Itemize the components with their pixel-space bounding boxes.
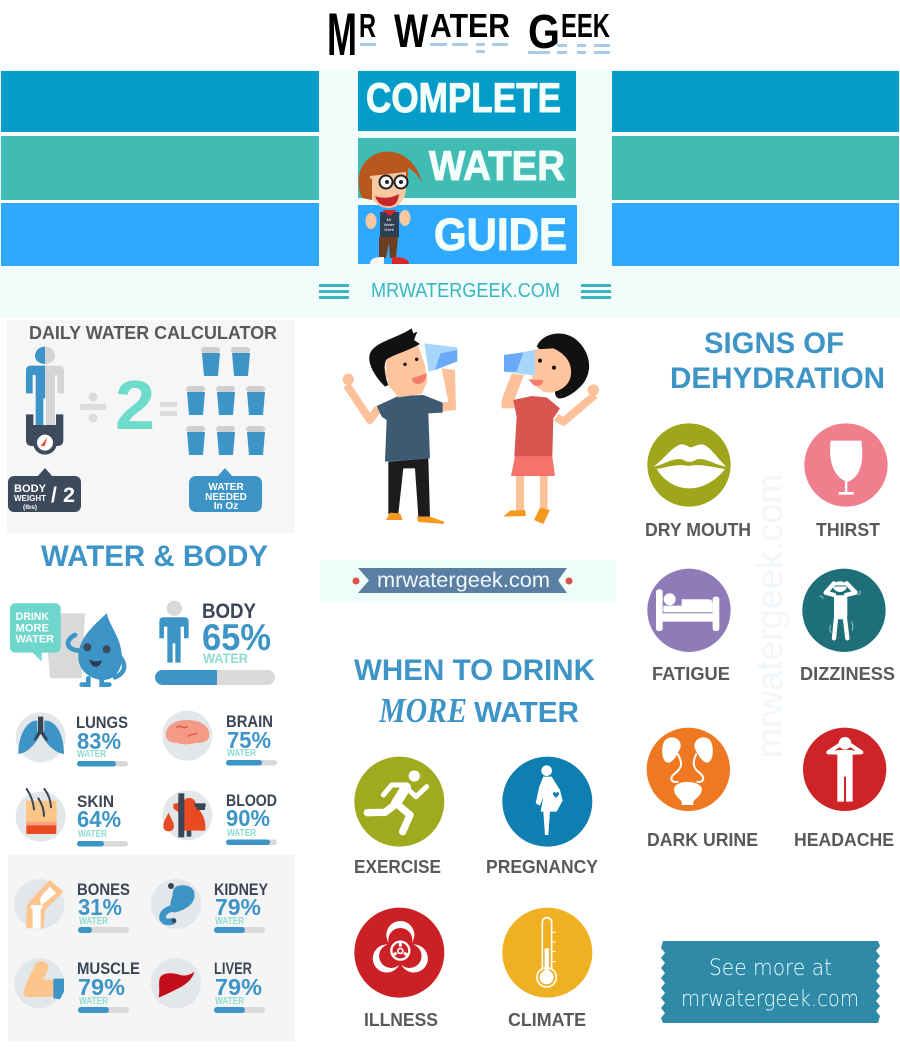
stat: kidney 79% [151,879,268,933]
icon: water glasses [186,347,265,455]
stat: liver 79% [151,958,265,1013]
heading: signs of dehydration [670,327,885,395]
callout: water needed in oz: NEEDED [205,492,247,503]
stat: brain 75% [162,711,277,766]
callout: water needed in oz: WATER [208,482,244,493]
heading: signs of dehydration: DEHYDRATION [670,362,885,395]
icon: dry mouth [647,423,731,507]
callout: see more at mrwatergeek.com: mrwatergeek.com [681,987,859,1012]
stat: blood 90%: 90% [226,805,270,831]
stat: bones 31%: WATER [79,916,109,927]
stat: lungs 83% [16,712,128,766]
stat: muscle 79% [14,958,140,1013]
title: Complete Water Guide: WATER [429,142,565,189]
icon: headache [803,728,886,811]
icon: equals sign [160,402,177,416]
icon: climate thermometer [502,908,592,998]
stat: blood 90%: BLOOD [226,792,277,810]
callout: body weight divided by 2 [8,468,81,512]
stat: blood 90%: WATER [227,828,257,839]
heading: when to drink more water [354,654,595,730]
watermark: mrwatergeek.com: mrwatergeek.com [749,474,790,758]
logo: Mr Water Geek: G [528,6,560,59]
stat: skin 64%: SKIN [77,793,114,811]
icon: body figure [159,601,189,663]
label: dry mouth: DRY MOUTH [645,520,751,540]
callout: body weight divided by 2: / [51,484,57,507]
big number two: 2 [115,366,155,444]
stat: muscle 79%: WATER [79,996,109,1007]
icon: drink more water drop: MORE [16,622,49,634]
banner: mrwatergeek.com ribbon: mrwatergeek.com [377,569,550,592]
icon: divide sign [80,392,106,422]
stat: body 65% water [155,600,275,685]
icon: stomach kidney [151,879,201,929]
label: illness: ILLNESS [364,1010,438,1030]
icon: flexed arm [14,958,64,1008]
banner: mrwatergeek.com ribbon [320,560,616,602]
stat: kidney 79%: 79% [215,894,261,920]
label: exercise: EXERCISE [354,857,441,877]
stat: bones 31% [14,879,130,933]
stat: body 65% water: BODY [202,600,256,623]
icon: drink more water drop [10,603,124,685]
logo: Mr Water Geek: R [359,7,376,44]
icon: drink more water drop: WATER [16,634,54,646]
label: pregnancy: PREGNANCY [486,857,598,877]
illustration: man drinking water [343,328,457,524]
heading: when to drink more water: WATER [474,697,579,729]
stat: skin 64%: 64% [77,806,121,832]
stat: lungs 83%: WATER [77,749,107,760]
logo: Mr Water Geek: ATER [430,7,510,44]
header background panel [0,70,900,318]
label: dark urine: DARK URINE [647,830,758,850]
label: climate: CLIMATE [508,1010,586,1030]
label: dizziness: DIZZINESS [800,664,895,684]
stat: body 65% water: 65% [202,617,271,658]
icon: heart and blood [162,790,212,840]
logo: Mr Water Geek: M [327,1,357,68]
stat: bones 31%: 31% [78,894,122,920]
stat: brain 75%: 75% [227,727,271,753]
callout: body weight divided by 2: WEIGHT [14,493,47,503]
title: Complete Water Guide [358,71,577,264]
callout: see more at mrwatergeek.com: See more at [709,956,832,981]
stat: kidney 79%: KIDNEY [214,881,268,899]
callout: body weight divided by 2: BODY [14,483,47,495]
stat: muscle 79%: 79% [78,974,125,1000]
logo: Mr Water Geek: W [394,4,428,57]
stat: blood 90% [162,790,277,845]
icon: lungs [16,712,66,762]
stat: lungs 83%: LUNGS [76,714,128,732]
icon: skin layers [16,789,66,842]
heading: daily water calculator: DAILY WATER CALCULATOR [29,322,277,343]
panel: organs lower grey [8,855,295,1041]
callout: water needed in oz: In Oz [214,501,238,512]
stat: liver 79%: WATER [215,996,245,1007]
icon: drink more water drop: DRINK [16,611,49,623]
icon: dizziness [802,569,886,652]
heading: when to drink more water: MORE [378,691,467,730]
callout: water needed in oz [189,468,262,512]
label: thirst: THIRST [816,520,880,540]
icon: fatigue bed [647,569,731,652]
title: Complete Water Guide: COMPLETE [366,74,561,121]
website strip: mrwatergeek.com: MRWATERGEEK.COM [371,280,560,302]
callout: body weight divided by 2: 2 [63,484,75,507]
icon: illness biohazard [354,908,444,998]
title: Complete Water Guide: GUIDE [434,209,567,260]
icon: brain [162,711,212,761]
stat: liver 79%: 79% [215,974,262,1000]
stat: lungs 83%: 83% [77,728,121,754]
label: fatigue: FATIGUE [652,664,730,684]
icon: liver [151,958,201,1008]
icon: body on scale [26,347,64,455]
stat: bones 31%: BONES [77,881,130,899]
icon: mascot [359,152,422,264]
heading: when to drink more water: WHEN TO DRINK [354,654,595,687]
stat: skin 64% [16,789,128,846]
heading: signs of dehydration: SIGNS OF [704,327,844,360]
icon: knee bones [14,879,64,929]
stat: kidney 79%: WATER [215,916,245,927]
label: headache: HEADACHE [794,830,894,850]
stat: body 65% water: WATER [203,651,248,666]
stat: skin 64%: WATER [78,829,108,840]
logo: Mr Water Geek [327,1,610,68]
icon: dark urine kidneys [647,728,730,811]
icon: mascot: Water [384,222,395,227]
logo: Mr Water Geek: EEK [561,7,610,44]
icon: thirst glass [804,423,888,507]
icon: exercise [354,757,444,847]
stat: liver 79%: LIVER [214,960,252,978]
stat: brain 75%: BRAIN [226,713,273,731]
panel: daily water calculator [7,320,295,533]
heading: water & body: WATER & BODY [41,540,268,573]
icon: pregnancy [502,757,592,847]
icon: mascot: Mr [387,217,392,222]
illustration: woman drinking water [502,333,599,524]
icon: mascot: Geek [384,227,394,232]
callout: body weight divided by 2: (lbs) [23,504,37,511]
callout: see more at mrwatergeek.com [661,941,880,1023]
stat: muscle 79%: MUSCLE [77,960,140,978]
stat: brain 75%: WATER [227,748,257,759]
